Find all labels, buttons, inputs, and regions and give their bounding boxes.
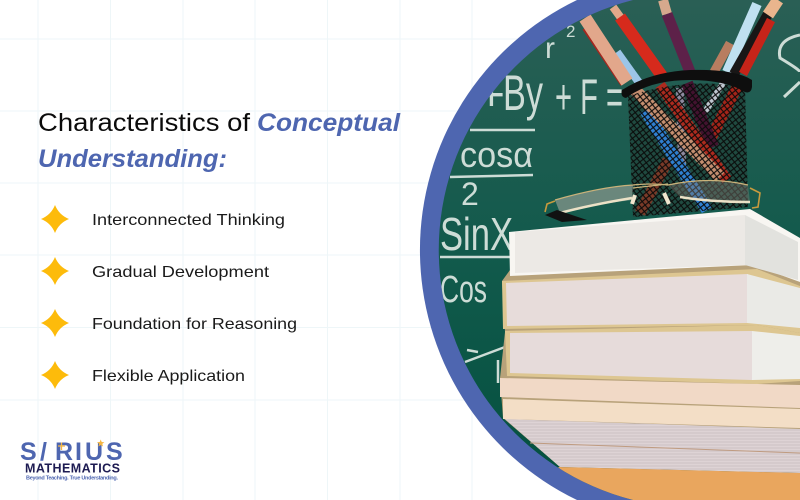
wire mesh: [628, 84, 748, 217]
title: Characteristics of: [38, 109, 250, 137]
photo: books, pencil holder and chalkboard: [430, 0, 800, 500]
third book: [505, 325, 800, 384]
second book: [502, 269, 800, 333]
logo: Sirius Mathematics: S/RIUS: [20, 438, 123, 466]
book stack: [500, 209, 800, 473]
holder interior: [628, 84, 748, 217]
chalkboard: [430, 0, 800, 500]
title: [38, 109, 401, 173]
chalk formulas: + F =: [555, 69, 623, 125]
chalk formulas: r: [545, 32, 555, 65]
chalk formulas: +: [478, 68, 505, 120]
glasses: [545, 180, 760, 222]
chalk formulas: 2: [461, 176, 479, 212]
list item: Flexible Application: Flexible Application: [92, 368, 245, 385]
list item: Flexible Application: [41, 361, 245, 389]
chalk formulas: SinX: [440, 208, 513, 260]
rim: [622, 70, 752, 98]
list item: Interconnected Thinking: Interconnected Thinking: [92, 212, 285, 229]
page blocks: [500, 378, 800, 473]
title: Conceptual: [257, 109, 401, 137]
stack backing: [500, 262, 800, 473]
pencils inside holder: [635, 83, 737, 213]
logo: Sirius Mathematics: MATHEMATICS: [25, 462, 120, 476]
wooden table: [558, 467, 800, 500]
chalk formulas: [440, 22, 800, 383]
chalk formulas: 2: [566, 22, 575, 41]
list item: Gradual Development: [41, 257, 270, 285]
chalk formulas: By: [503, 65, 543, 121]
list item: Interconnected Thinking: [41, 205, 285, 233]
blue circle frame: [420, 0, 800, 500]
title: Understanding:: [38, 145, 227, 173]
chalk formulas: Cos: [440, 269, 487, 311]
logo: Sirius Mathematics: [20, 438, 123, 482]
chalk formulas: cosα: [460, 134, 533, 175]
pencils above holder: [585, 0, 778, 84]
list item: Gradual Development: Gradual Development: [92, 264, 270, 281]
list item: Foundation for Reasoning: [41, 309, 297, 337]
top book: [509, 209, 800, 282]
logo: Sirius Mathematics: Beyond Teaching. True Understanding.: [26, 476, 118, 482]
list: characteristics: [41, 205, 297, 389]
mesh pencil holder: [622, 70, 752, 217]
list item: Foundation for Reasoning: Foundation for Reasoning: [92, 316, 297, 333]
